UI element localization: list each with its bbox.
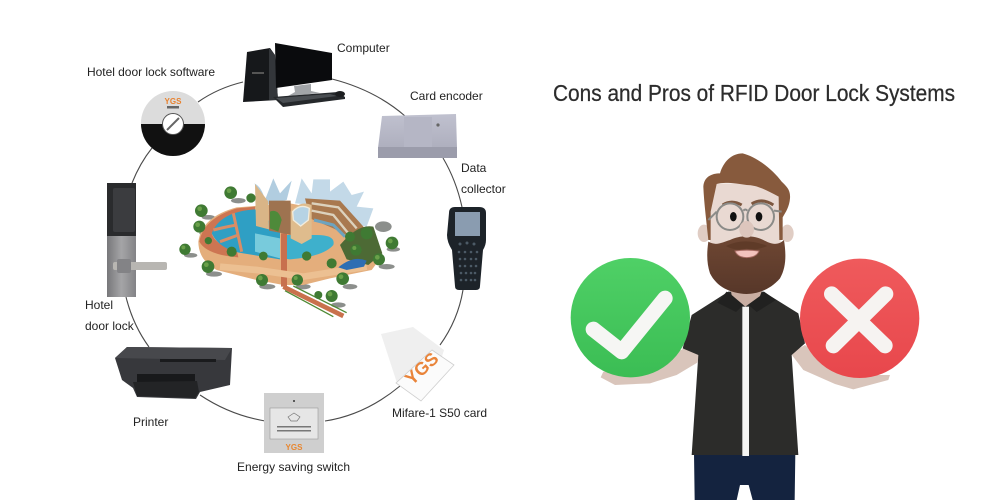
icon: software disc: YGS xyxy=(165,97,182,106)
eyes xyxy=(730,212,737,221)
neck xyxy=(730,287,763,307)
label: data collector xyxy=(461,161,506,196)
glasses xyxy=(708,203,782,230)
collar xyxy=(717,292,776,312)
label: computer: Computer xyxy=(337,41,390,55)
ears xyxy=(698,225,710,242)
centre block xyxy=(269,201,291,235)
icon: mifare cards: YGS xyxy=(401,348,443,389)
left shell roofs xyxy=(254,178,292,205)
label: data collector: Data xyxy=(461,161,487,175)
icon: energy saving switch xyxy=(264,393,324,453)
face xyxy=(710,183,781,250)
stadium stands xyxy=(305,198,365,238)
icon: computer xyxy=(243,43,345,107)
icon: red cross xyxy=(800,259,919,378)
blue slide xyxy=(338,259,367,270)
label: mifare card: Mifare-1 S50 card xyxy=(392,406,487,420)
label: hotel door lock xyxy=(85,298,135,333)
eyebrows xyxy=(723,201,773,205)
right arm xyxy=(791,345,890,389)
stadium spikes xyxy=(295,178,373,227)
label: hotel door lock: door lock xyxy=(85,319,135,333)
icon: card encoder xyxy=(378,114,457,158)
shirt placket xyxy=(742,307,749,456)
left tower xyxy=(255,184,269,229)
icon: energy saving switch: YGS xyxy=(286,443,303,452)
icon: mifare cards xyxy=(381,327,454,401)
connection ring xyxy=(126,79,463,421)
title: Cons and Pros of RFID Door Lock Systems xyxy=(553,80,955,106)
beard xyxy=(707,236,785,294)
icon: software disc xyxy=(141,91,205,156)
trees xyxy=(179,186,398,302)
label: energy saving switch: Energy saving switch xyxy=(237,460,350,474)
forest xyxy=(340,226,382,265)
illustration: resort island xyxy=(179,178,400,317)
nose xyxy=(739,221,754,238)
front tower xyxy=(291,203,312,244)
ground xyxy=(198,203,382,285)
illustration: bearded man with check and cross xyxy=(571,153,919,500)
tree shadows xyxy=(184,198,400,308)
pool xyxy=(212,209,280,259)
label: printer: Printer xyxy=(133,415,168,429)
hair xyxy=(703,153,790,240)
label: data collector: collector xyxy=(461,182,506,196)
mustache and mouth xyxy=(726,241,767,250)
icon: data collector xyxy=(447,207,486,290)
pants xyxy=(694,453,795,500)
icon: hotel door lock xyxy=(107,183,167,297)
icon: green check xyxy=(571,258,690,377)
left arm xyxy=(601,348,700,385)
label: hotel door lock: Hotel xyxy=(85,298,113,312)
label: card encoder: Card encoder xyxy=(410,89,483,103)
shirt xyxy=(683,292,805,455)
icon: printer xyxy=(115,347,232,399)
label: hotel door lock software: Hotel door lock software xyxy=(87,65,215,79)
